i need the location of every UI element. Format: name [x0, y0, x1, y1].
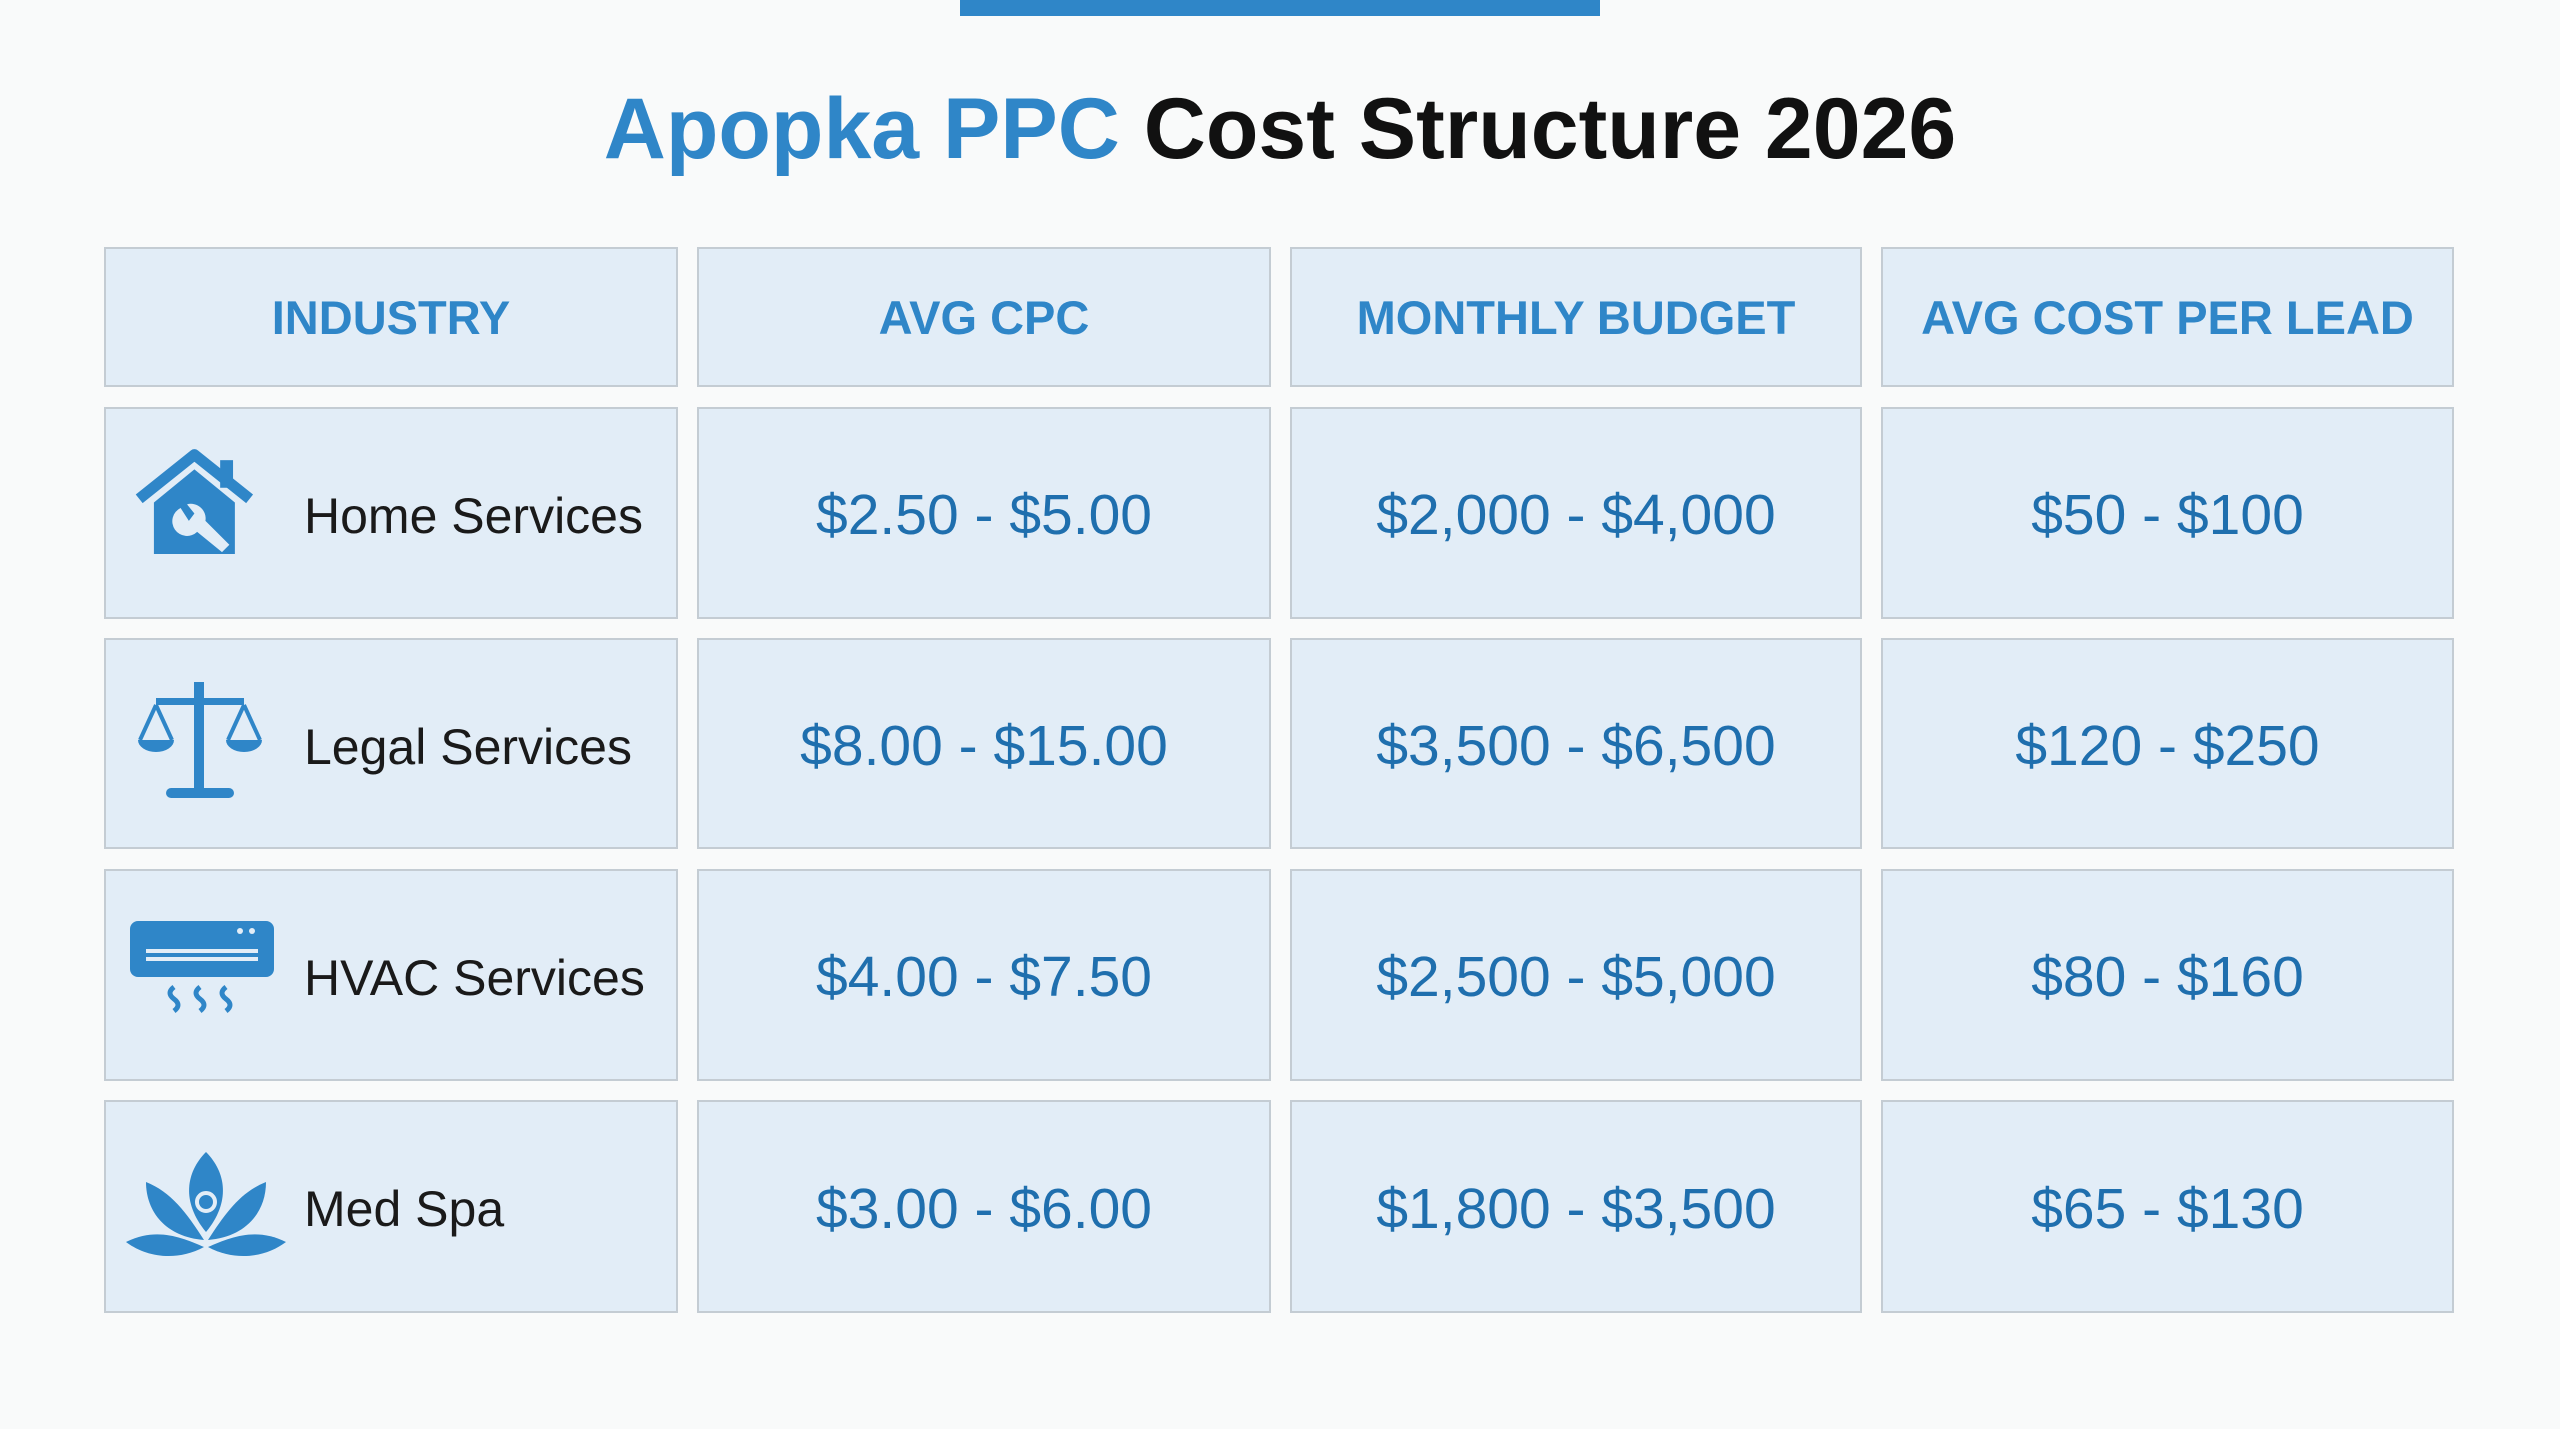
header: monthly budget: MONTHLY BUDGET [1357, 290, 1795, 344]
header: industry [104, 247, 678, 387]
value: budget home [1290, 407, 1862, 619]
row: hvac services [104, 869, 678, 1081]
label: Med Spa [304, 1181, 504, 1237]
value: budget med spa [1290, 1100, 1862, 1313]
value: avg cpc med spa [697, 1100, 1271, 1313]
value: avg cpc legal: $8.00 - $15.00 [800, 714, 1168, 778]
value: cpl hvac [1881, 869, 2454, 1081]
top accent bar [960, 0, 1600, 16]
value: cpl home [1881, 407, 2454, 619]
value: cpl hvac: $80 - $160 [2031, 945, 2304, 1009]
header: avg cpc [697, 247, 1271, 387]
value: cpl med spa: $65 - $130 [2031, 1176, 2304, 1240]
header: avg cost per lead: AVG COST PER LEAD [1921, 290, 2414, 344]
value: cpl legal: $120 - $250 [2015, 714, 2320, 778]
value: cpl home: $50 - $100 [2031, 483, 2304, 547]
value: avg cpc hvac: $4.00 - $7.50 [816, 945, 1152, 1009]
header: avg cpc: AVG CPC [879, 290, 1089, 344]
label: Legal Services [304, 719, 632, 775]
row: legal services [104, 638, 678, 849]
value: budget legal: $3,500 - $6,500 [1376, 714, 1776, 778]
header: industry: INDUSTRY [272, 290, 510, 344]
icon: scales [138, 682, 262, 798]
label: Home Services [304, 488, 643, 544]
label: HVAC Services [304, 950, 645, 1006]
icon: air conditioner [130, 921, 274, 1013]
value: avg cpc hvac [697, 869, 1271, 1081]
value: cpl med spa [1881, 1100, 2454, 1313]
value: budget med spa: $1,800 - $3,500 [1376, 1176, 1776, 1240]
value: budget hvac [1290, 869, 1862, 1081]
header: avg cost per lead [1881, 247, 2454, 387]
value: cpl legal [1881, 638, 2454, 849]
title: Apopka PPC Cost Structure 2026 [604, 81, 1956, 177]
value: budget legal [1290, 638, 1862, 849]
value: avg cpc home [697, 407, 1271, 619]
value: budget home: $2,000 - $4,000 [1376, 483, 1776, 547]
value: avg cpc legal [697, 638, 1271, 849]
icon: house with wrench [136, 449, 253, 554]
row: home services [104, 407, 678, 619]
value: budget hvac: $2,500 - $5,000 [1376, 945, 1776, 1009]
row: med spa [104, 1100, 678, 1313]
value: avg cpc med spa: $3.00 - $6.00 [816, 1176, 1152, 1240]
header: monthly budget [1290, 247, 1862, 387]
value: avg cpc home: $2.50 - $5.00 [816, 483, 1152, 547]
icon: lotus [126, 1152, 286, 1256]
